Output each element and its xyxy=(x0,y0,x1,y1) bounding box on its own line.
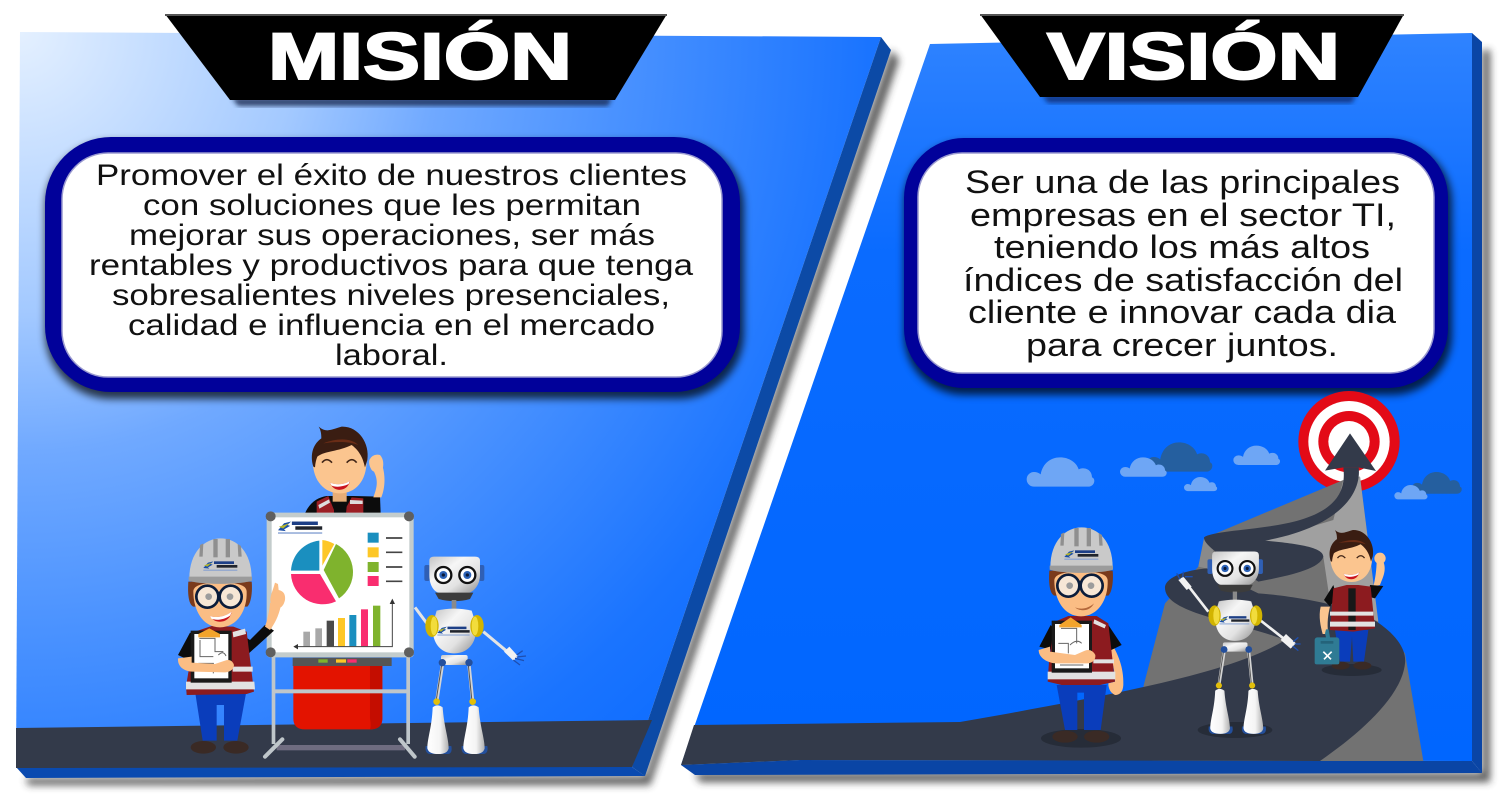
text block: visión: para crecer juntos. xyxy=(1026,327,1338,363)
text block: misión: calidad e influencia en el mercado xyxy=(128,309,655,342)
character: robot waving xyxy=(1177,552,1301,738)
character: man with toolbox xyxy=(1315,530,1386,676)
title: misión: MISIÓN xyxy=(268,19,572,93)
text block: misión xyxy=(89,159,693,372)
mountain xyxy=(1143,477,1423,761)
character: man behind board xyxy=(305,427,385,513)
pie chart xyxy=(291,540,353,604)
title: visión: VISIÓN xyxy=(1047,19,1340,93)
callout: misión statement xyxy=(45,137,744,399)
callout: visión statement xyxy=(904,138,1452,395)
panel: misión xyxy=(16,32,899,785)
clouds xyxy=(1027,442,1462,499)
banner: visión xyxy=(980,14,1404,103)
character: robot xyxy=(415,557,526,754)
text block: misión: sobresalientes niveles presenciales, xyxy=(112,279,670,312)
text block: visión xyxy=(963,164,1403,363)
scene: misión characters and whiteboard xyxy=(178,427,526,757)
target xyxy=(1298,391,1400,492)
floor: misión xyxy=(16,720,652,768)
text block: visión: teniendo los más altos xyxy=(994,229,1370,265)
text block: misión: mejorar sus operaciones, ser más xyxy=(129,219,655,252)
text block: visión: empresas en el sector TI, xyxy=(970,197,1396,233)
text block: misión: con soluciones que les permitan xyxy=(143,189,641,222)
text block: misión: Promover el éxito de nuestros clientes xyxy=(96,159,687,192)
road xyxy=(681,433,1405,765)
character: engineer with plan xyxy=(1039,527,1123,748)
text block: visión: cliente e innovar cada dia xyxy=(968,294,1396,330)
arrow head xyxy=(1325,433,1376,471)
banner: misión xyxy=(165,14,667,106)
text block: visión: Ser una de las principales xyxy=(965,164,1400,200)
legend xyxy=(368,533,402,586)
stand: red table xyxy=(265,657,415,757)
panel: visión xyxy=(681,33,1490,782)
scene: visión road, target and characters xyxy=(681,391,1462,765)
character: engineer with clipboard xyxy=(178,538,285,754)
whiteboard xyxy=(266,511,414,666)
bar chart xyxy=(293,599,395,649)
text block: visión: índices de satisfacción del xyxy=(963,262,1403,298)
text block: misión: laboral. xyxy=(335,339,448,372)
text block: misión: rentables y productivos para que tenga xyxy=(89,249,693,282)
